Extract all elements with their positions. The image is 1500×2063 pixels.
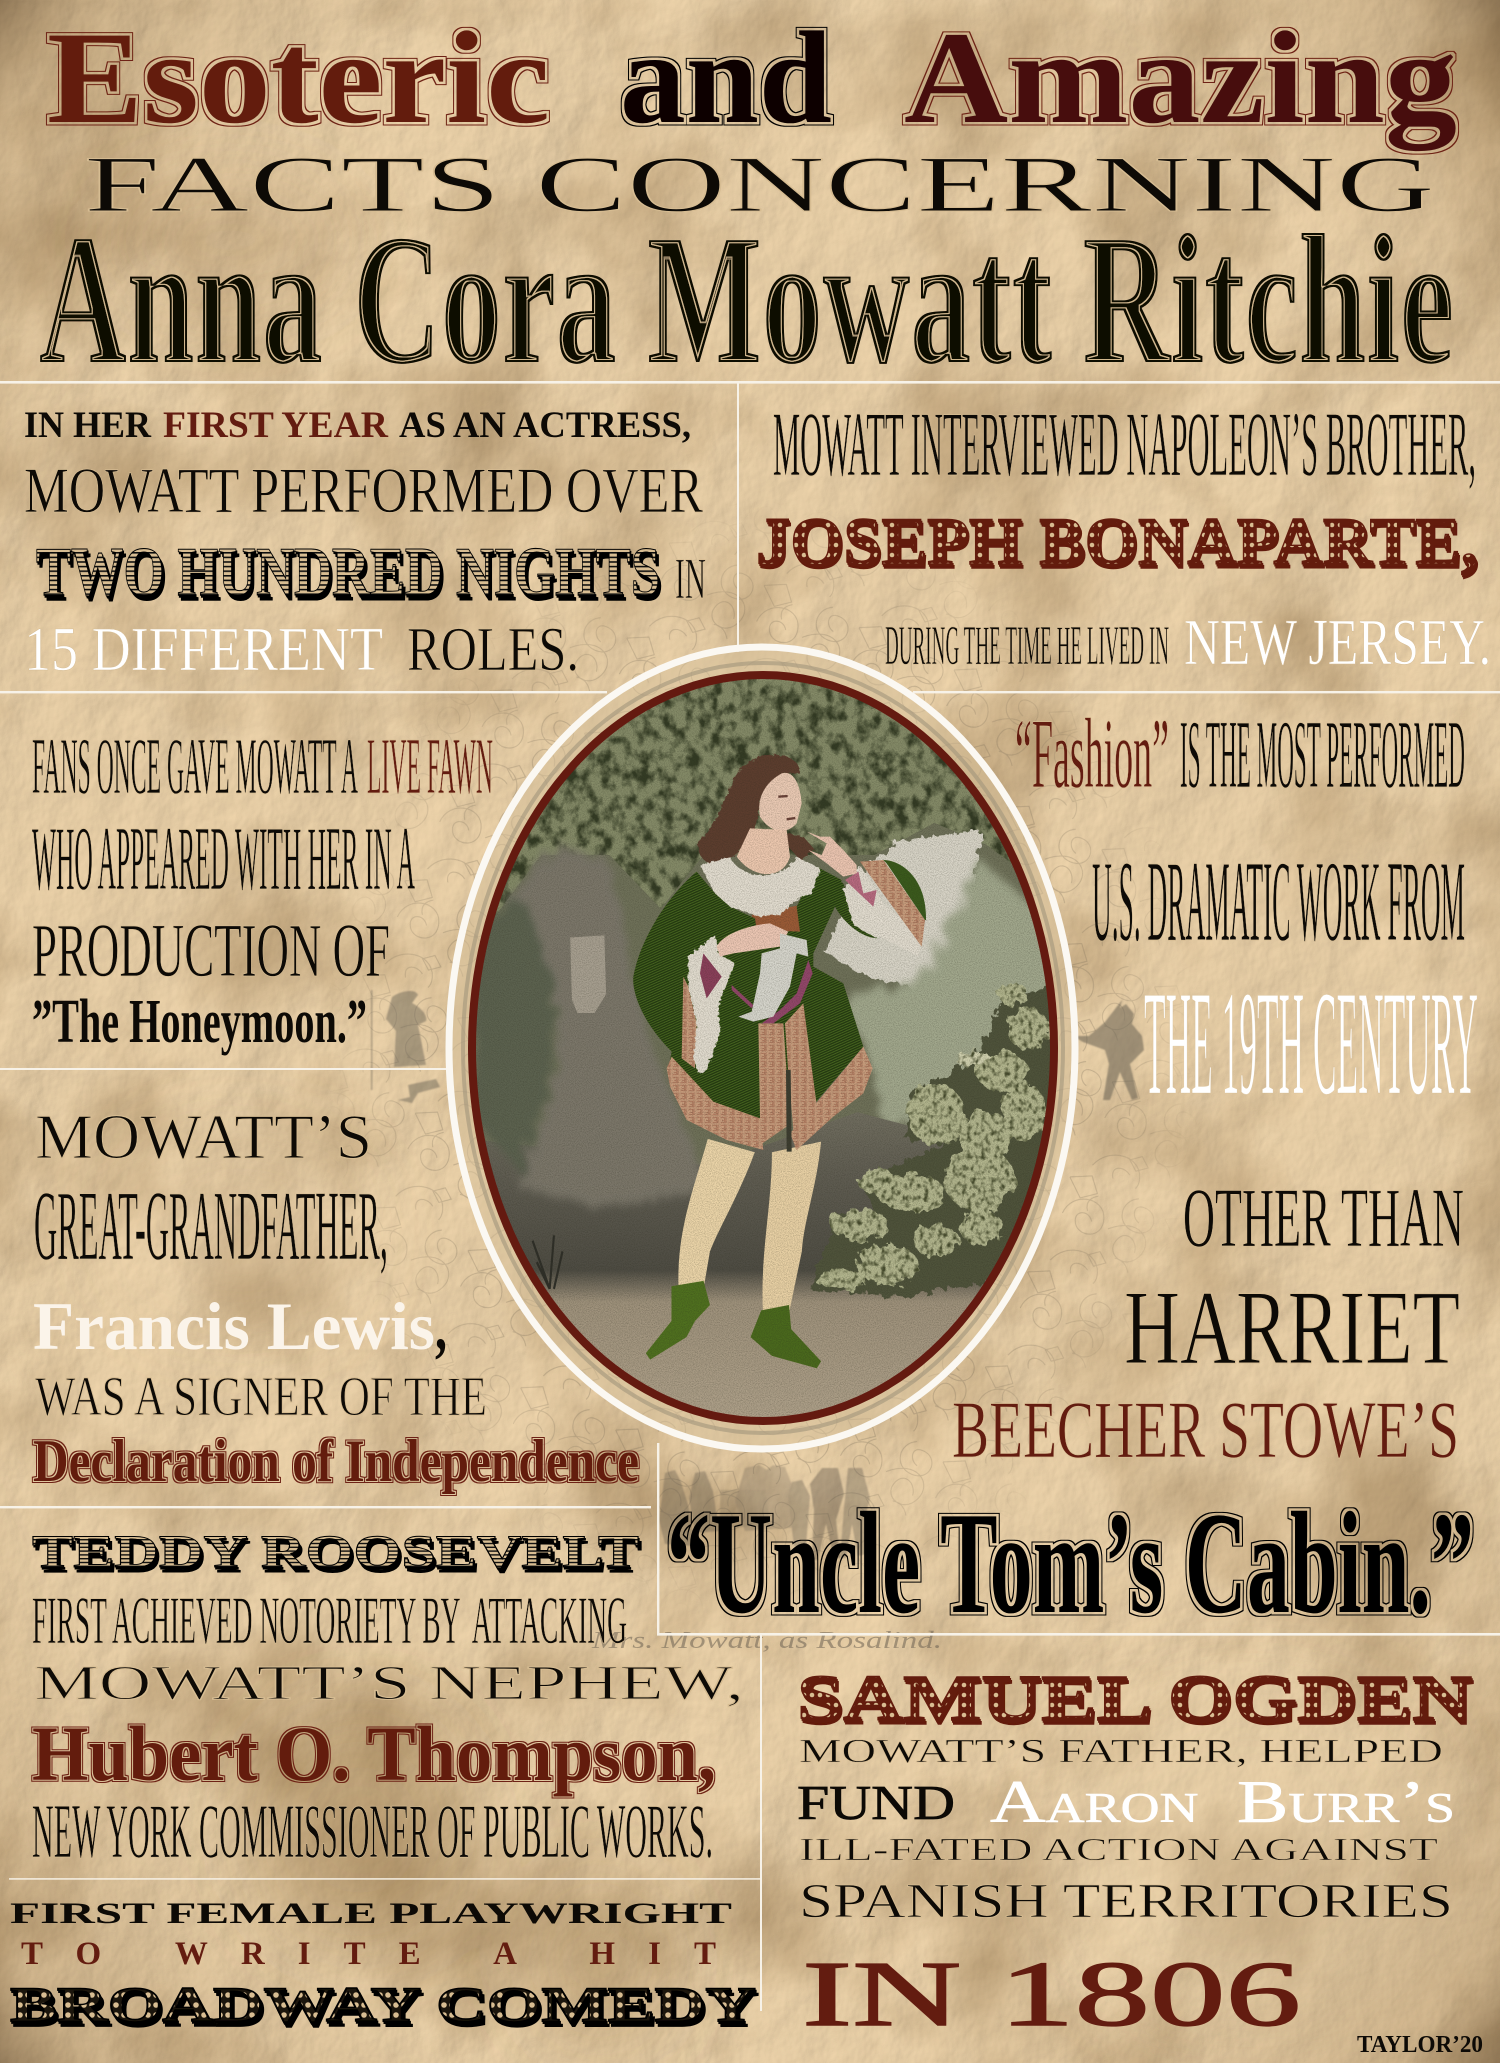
title line: Facts Concerning: FACTS CONCERNING	[84, 141, 1435, 229]
notice on tree	[570, 935, 606, 1013]
title line: Esoteric and Amazing	[47, 4, 1457, 151]
line: Two hundred nights in: IN	[675, 546, 706, 611]
title line: Esoteric and Amazing: and	[620, 4, 832, 151]
line: Was a signer of the: WAS A SIGNER OF THE	[35, 1366, 487, 1428]
engraved vignette: crowd scene	[659, 1465, 870, 1560]
line: In her first year as an actress: IN HER	[24, 405, 152, 446]
portrait background: foreground leaves	[810, 982, 1058, 1297]
line: Francis Lewis: Francis Lewis	[33, 1288, 435, 1364]
line: Fashion is the most performed: “Fashion”	[1015, 698, 1169, 809]
line: Joseph Bonaparte: JOSEPH BONAPARTE,	[756, 503, 1478, 579]
red oval border	[472, 675, 1054, 1421]
line: First female playwright: FIRST FEMALE PLAYWRIGHT	[10, 1897, 732, 1930]
figure: eye and lips	[778, 796, 795, 819]
portrait painting	[468, 673, 1058, 1428]
line: In 1806: IN 1806	[802, 1943, 1301, 2046]
figure: tunic	[633, 867, 863, 1118]
line: Hubert O. Thompson: Hubert O. Thompson,	[32, 1710, 716, 1797]
panel: great-grandfather Francis Lewis	[33, 1101, 639, 1494]
line: Fans once gave Mowatt a live fawn	[32, 723, 493, 811]
line: Mowatt's nephew: MOWATT’S NEPHEW,	[34, 1655, 744, 1710]
figure: tunic trim and central panels	[667, 1003, 873, 1150]
portrait background: tree trunk	[507, 844, 708, 1209]
panel: great-grandfather Francis Lewis: GREAT-GRANDFATHER,	[34, 1170, 388, 1281]
line: Mowatt's: MOWATT’S	[35, 1101, 372, 1172]
title line: Esoteric and Amazing: Amazing	[904, 4, 1457, 151]
line: The Honeymoon: ”The Honeymoon.”	[32, 988, 367, 1056]
figure: lace collar	[700, 857, 820, 917]
line: Ill-fated action against: ILL-FATED ACTION AGAINST	[799, 1831, 1439, 1867]
white oval frame	[449, 647, 1075, 1449]
title	[39, 4, 1457, 403]
portrait background: ground bands	[486, 1117, 1001, 1417]
text: WHO APPEARED WITH HER IN A	[32, 808, 415, 909]
line: Broadway comedy: BROADWAY COMEDY	[10, 1976, 756, 2032]
engraved vignette: woman with staff	[371, 990, 440, 1103]
figure: raised hand	[807, 832, 857, 877]
panel: first year as an actress	[24, 405, 706, 684]
line: 15 different roles: 15 DIFFERENT	[24, 616, 383, 684]
figure: legs	[678, 1139, 755, 1294]
line: Fund Aaron Burr's: FUND	[797, 1775, 955, 1830]
title line: Esoteric and Amazing: Esoteric	[47, 4, 550, 151]
figure: lowered sleeve trim	[682, 977, 697, 1068]
engraving grain	[468, 673, 1058, 1428]
text: LIVE FAWN	[367, 723, 493, 811]
line: Fund Aaron Burr's	[797, 1769, 1455, 1835]
panel: first female playwright	[10, 1897, 756, 2032]
line: Mowatt's father, helped: MOWATT’S FATHER, HELPED	[799, 1733, 1443, 1770]
line: In her first year as an actress: AS AN ACTRESS,	[399, 405, 691, 446]
engraved caption: Mowatt as Rosalind: Mrs. Mowatt, as Rosalind.	[591, 1628, 942, 1654]
line: Francis Lewis: ,	[435, 1288, 447, 1364]
line: Mowatt performed over: MOWATT PERFORMED OVER	[24, 455, 703, 527]
line: To write a hit: TO WRITE A HIT	[21, 1936, 716, 1972]
figure: scroll	[738, 933, 808, 1022]
figure: upper body	[633, 755, 926, 1152]
figure: raised sleeve cuff	[843, 865, 923, 957]
line: Samuel Ogden: SAMUEL OGDEN	[797, 1662, 1472, 1735]
panel: Fashion	[667, 698, 1478, 1644]
engraved vignette: jester	[1073, 1000, 1144, 1100]
figure: face	[759, 773, 802, 831]
faint ornamental scrollwork behind portrait	[320, 500, 1200, 1620]
panel: live fawn	[32, 723, 493, 1056]
panel divider rules	[0, 381, 1500, 2011]
line: Teddy Roosevelt: TEDDY ROOSEVELT	[32, 1526, 639, 1578]
figure: lowered sleeve cuff	[688, 935, 735, 1073]
portrait medallion	[449, 647, 1075, 1449]
panel: Teddy Roosevelt	[32, 1526, 744, 1874]
figure: hair	[698, 755, 815, 863]
line: Spanish territories: SPANISH TERRITORIES	[799, 1873, 1453, 1928]
text: FANS ONCE GAVE MOWATT A	[32, 723, 358, 811]
line: In her first year as an actress	[24, 405, 691, 446]
figure: neck and chest	[737, 828, 790, 874]
portrait background: sky and distant hills	[823, 831, 986, 989]
text: FIRST ACHIEVED NOTORIETY BY ATTACKING	[32, 1582, 627, 1658]
figure: raised sleeve	[820, 868, 878, 938]
grass tuft	[533, 1235, 562, 1289]
line: Production of: PRODUCTION OF	[32, 909, 390, 993]
line: Two hundred nights in: TWO HUNDRED NIGHTS	[36, 534, 660, 611]
portrait background: foliage canopy	[495, 679, 1011, 916]
figure: boots	[646, 1281, 710, 1360]
panel: Joseph Bonaparte	[756, 393, 1491, 679]
figure: lower hand	[717, 923, 788, 957]
line: Declaration of Independence: Declaration of Independence	[33, 1428, 639, 1494]
panel: Samuel Ogden	[797, 1662, 1472, 2046]
figure: belt	[732, 960, 813, 1023]
line: Fund Aaron Burr's: Aaron Burr’s	[990, 1769, 1455, 1835]
line: In her first year as an actress: FIRST YEAR	[163, 405, 389, 446]
line: 15 different roles: ROLES.	[407, 616, 579, 684]
figure: chest panel	[752, 905, 802, 935]
figure: central gap	[786, 1070, 792, 1152]
artist signature: TAYLOR’20	[1357, 2032, 1483, 2058]
